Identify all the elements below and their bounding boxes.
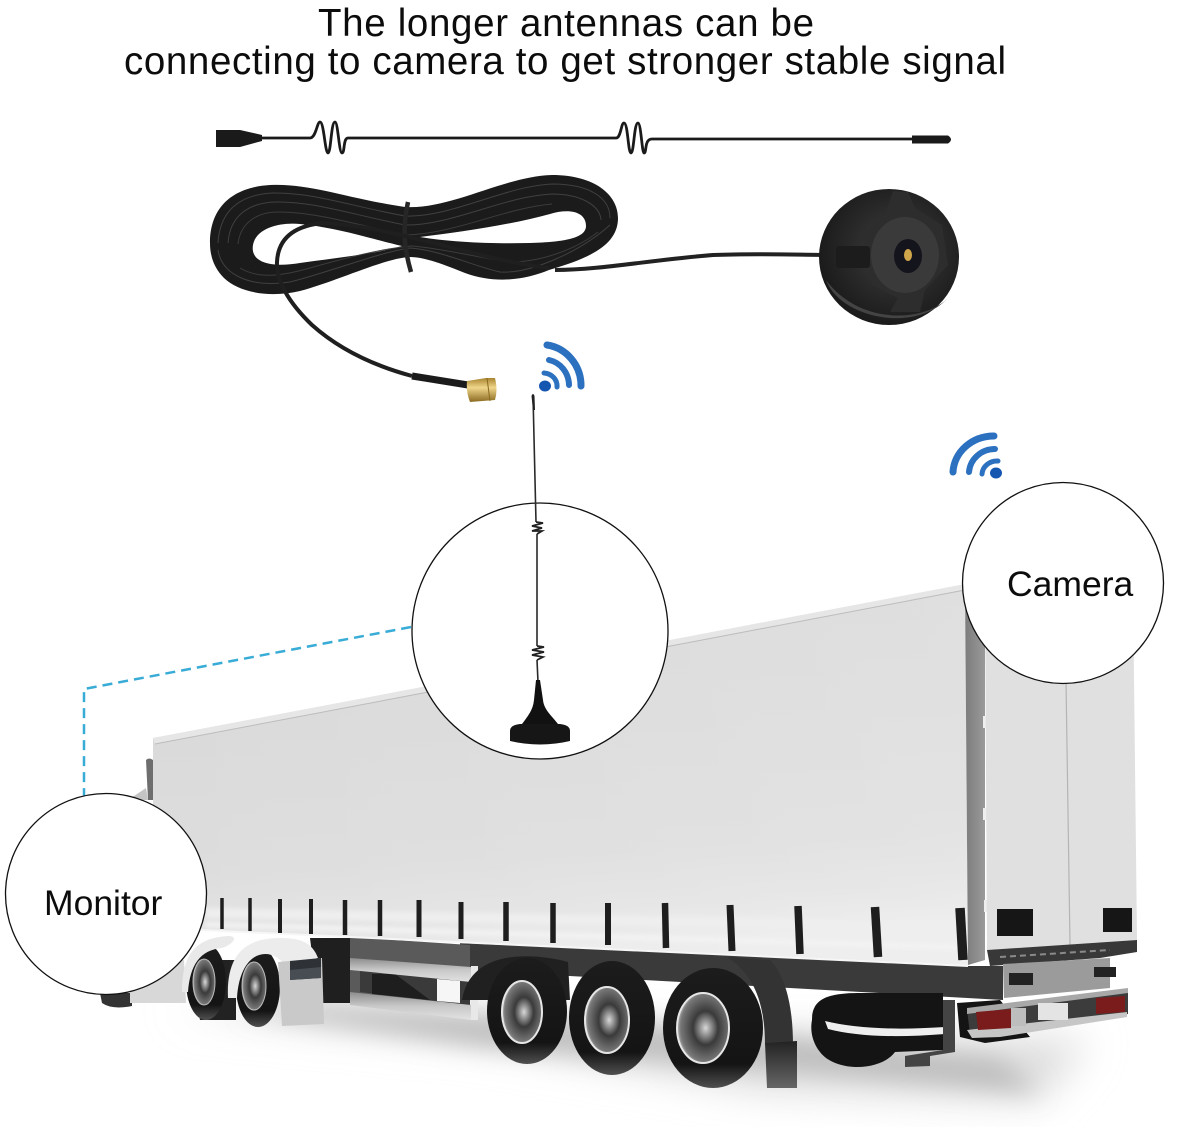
title: The longer antennas can be bbox=[318, 2, 814, 45]
rear underbody bbox=[957, 958, 1116, 1043]
rear trailer wheels bbox=[462, 956, 797, 1088]
trailer rear doors bbox=[985, 590, 1137, 966]
whip antenna, horizontal bbox=[216, 122, 951, 153]
callout circle: monitor bbox=[6, 794, 206, 994]
ground shadow bbox=[170, 1000, 1090, 1100]
rear bumper and tail lights bbox=[967, 988, 1128, 1038]
trailer rear corner post bbox=[965, 584, 989, 965]
callout circle: camera bbox=[962, 482, 1164, 684]
front bumper and step bbox=[100, 960, 186, 1007]
callout circle: camera: Camera bbox=[1007, 564, 1134, 604]
chassis bbox=[310, 937, 1003, 1015]
coiled antenna cable bbox=[210, 175, 838, 376]
spare wheel bbox=[811, 993, 955, 1067]
title: connecting to camera to get stronger stable signal bbox=[124, 40, 1006, 83]
callout circle: antenna bbox=[412, 503, 668, 759]
vertical magnetic antenna bbox=[510, 394, 570, 744]
trailer side curtain bbox=[153, 584, 968, 966]
connector: gold SMA plug bbox=[412, 376, 496, 402]
trailer straps bbox=[222, 898, 963, 960]
dashed connection line bbox=[84, 627, 411, 796]
tractor wheels and fenders bbox=[182, 936, 324, 1027]
title bbox=[124, 2, 1006, 83]
side guard rails bbox=[350, 958, 478, 1020]
callout circle: monitor: Monitor bbox=[44, 883, 163, 923]
wifi icon: antenna signal bbox=[539, 345, 581, 392]
tractor cab mirror bbox=[128, 758, 153, 800]
magnetic base bbox=[819, 189, 959, 325]
truck bbox=[100, 584, 1137, 1088]
wifi icon: camera signal bbox=[953, 436, 1002, 478]
